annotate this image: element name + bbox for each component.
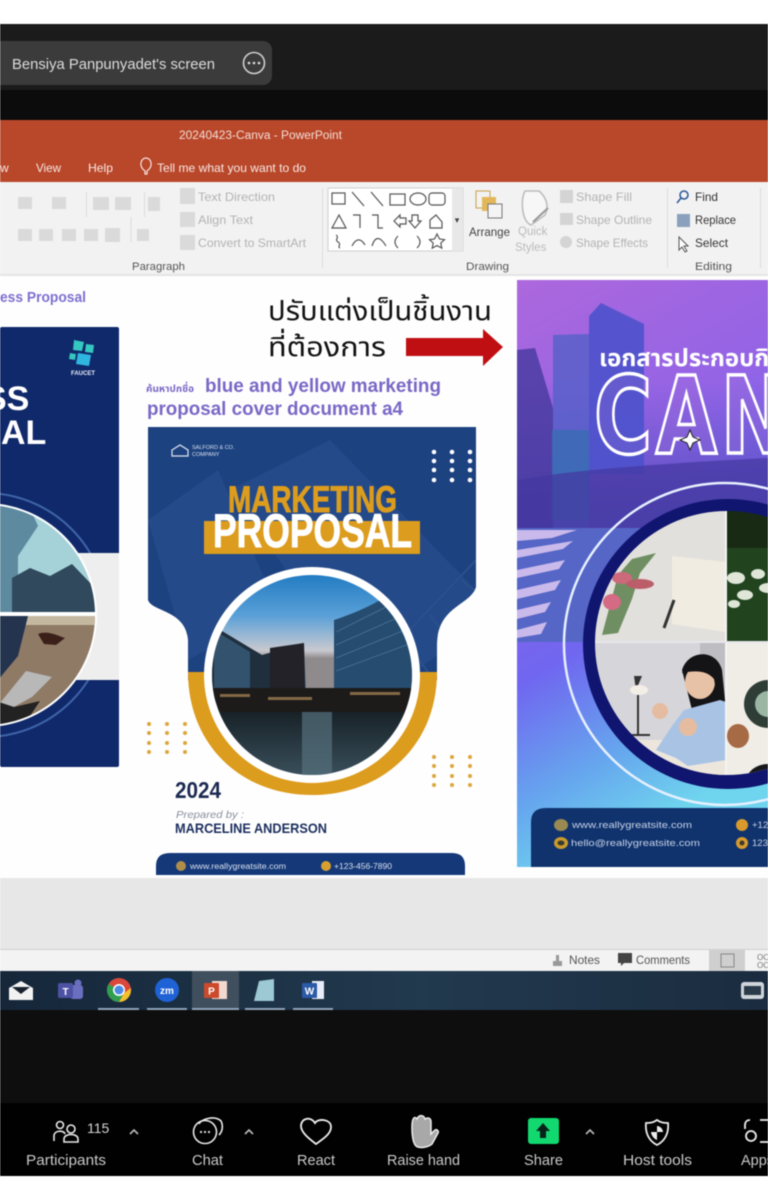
photo: tulips and card — [595, 510, 726, 642]
white dots — [432, 450, 472, 482]
icon: photo app — [254, 979, 274, 1001]
icon: word: W — [305, 986, 315, 998]
company logo — [172, 445, 235, 458]
caret — [130, 1130, 138, 1134]
left cover label: ess Proposal — [0, 289, 86, 306]
instruction heading — [268, 294, 492, 362]
gold arc — [188, 672, 437, 795]
editing commands: Replace — [695, 213, 736, 227]
editing commands: Find — [695, 190, 718, 204]
editing commands — [677, 190, 736, 273]
arrange icon — [476, 191, 502, 218]
powerpoint title and menu bar: Tell me what you want to do — [157, 161, 306, 175]
icon: tray — [741, 982, 764, 999]
gold dots right — [432, 755, 472, 787]
contact footer: www.reallygreatsite.com — [571, 820, 692, 831]
search keyword text: blue and yellow marketing — [205, 376, 441, 397]
purple city photo band — [517, 303, 768, 642]
powerpoint title and menu bar — [0, 120, 768, 182]
cover title fragment — [0, 380, 46, 452]
zoom toolbar — [26, 1116, 768, 1169]
raise hand — [387, 1116, 460, 1169]
powerpoint title and menu bar: w — [0, 161, 9, 175]
circular building photo — [200, 567, 424, 783]
ribbon: Text Direction — [198, 190, 275, 204]
canva final cover — [517, 280, 768, 867]
participants: 115 — [87, 1120, 110, 1136]
search keyword text: proposal cover document a4 — [147, 399, 403, 420]
icon: teams — [58, 980, 83, 999]
windows taskbar — [0, 971, 768, 1010]
status bar: Comments — [636, 955, 690, 967]
status bar: Notes — [569, 955, 600, 967]
search keyword text: ค้นหาปกชื่อ — [146, 381, 194, 395]
company logo: COMPANY — [192, 452, 220, 458]
company logo: SALFORD & CO. — [192, 445, 235, 451]
chat: Chat — [192, 1153, 223, 1169]
ribbon: Paragraph — [132, 261, 185, 273]
year and author: Prepared by : — [176, 809, 244, 821]
photo: food bowl — [726, 642, 768, 776]
powerpoint title and menu bar: View — [36, 161, 61, 175]
host tools — [623, 1120, 692, 1169]
ribbon — [0, 182, 768, 276]
quick styles icon — [522, 191, 548, 225]
ribbon: Shape Effects — [576, 236, 648, 250]
screen share name pill: Bensiya Panpunyadet's screen — [12, 56, 215, 73]
status bar — [0, 949, 768, 971]
title: MARKETING — [228, 479, 397, 520]
year and author — [175, 777, 327, 836]
title — [204, 479, 420, 557]
instruction heading: ที่ต้องการ — [268, 328, 386, 362]
host tools: Host tools — [623, 1153, 692, 1169]
chat — [192, 1118, 223, 1169]
icon: powerpoint — [204, 981, 227, 999]
slide canvas — [0, 276, 768, 878]
react — [297, 1119, 335, 1169]
ribbon: Align Text — [198, 213, 254, 227]
share — [524, 1118, 563, 1169]
contact footer: hello@reallygreatsite.com — [571, 838, 700, 849]
cursor — [680, 430, 700, 450]
contact footer — [531, 808, 768, 867]
ribbon: Convert to SmartArt — [198, 236, 307, 250]
icon: zoom: zm — [160, 986, 174, 997]
ribbon: Quick — [518, 226, 548, 238]
icon: chrome — [107, 978, 131, 1002]
screen share name pill — [0, 41, 272, 85]
title: PROPOSAL — [213, 504, 412, 557]
marketing proposal cover — [147, 427, 497, 875]
circular photo — [0, 500, 100, 726]
icon: teams: T — [62, 987, 69, 998]
cover title fragment: AL — [1, 414, 46, 452]
shapes gallery — [328, 188, 463, 251]
arrow: red pointing to final cover — [406, 329, 503, 366]
shapes gallery: ▾ — [455, 215, 460, 225]
caret — [245, 1130, 253, 1134]
react: React — [297, 1153, 335, 1169]
share: Share — [524, 1153, 563, 1169]
year and author: 2024 — [175, 777, 221, 803]
caret — [586, 1130, 594, 1134]
contact bar: www.reallygreatsite.com — [189, 862, 286, 871]
editing commands: Editing — [695, 261, 732, 273]
paragraph group buttons — [18, 188, 195, 250]
ribbon: Styles — [515, 242, 547, 254]
icon: powerpoint: P — [208, 986, 215, 998]
powerpoint title and menu bar: 20240423-Canva - PowerPoint — [179, 130, 343, 142]
contact bar: +123-456-7890 — [334, 862, 393, 871]
apps — [741, 1120, 768, 1169]
powerpoint title and menu bar: Help — [88, 161, 113, 175]
ribbon: Shape Fill — [576, 190, 632, 204]
icon: zoom — [155, 978, 179, 1002]
left business proposal cover — [0, 327, 119, 767]
photo: woman at desk — [595, 642, 726, 790]
icon: word — [302, 981, 324, 999]
photo: daisies — [726, 510, 768, 642]
icon: mail — [9, 981, 33, 1000]
faucet logo: FAUCET — [71, 371, 95, 377]
photo circle with rings — [564, 483, 768, 805]
instruction heading: ปรับแต่งเป็นชิ้นงาน — [268, 294, 492, 326]
gold dots left — [147, 722, 187, 754]
ribbon: Drawing — [466, 261, 509, 273]
editing commands: Select — [695, 236, 729, 250]
participants — [26, 1120, 110, 1169]
contact bar — [156, 853, 465, 875]
ribbon: Arrange — [469, 227, 510, 239]
participants: Participants — [26, 1153, 106, 1169]
gray pasteboard area — [0, 878, 768, 949]
raise hand: Raise hand — [387, 1153, 460, 1169]
blue top shape — [148, 427, 476, 680]
year and author: MARCELINE ANDERSON — [175, 820, 327, 836]
search keyword text — [146, 376, 441, 420]
faucet logo — [69, 340, 95, 377]
ribbon: Shape Outline — [576, 213, 652, 227]
